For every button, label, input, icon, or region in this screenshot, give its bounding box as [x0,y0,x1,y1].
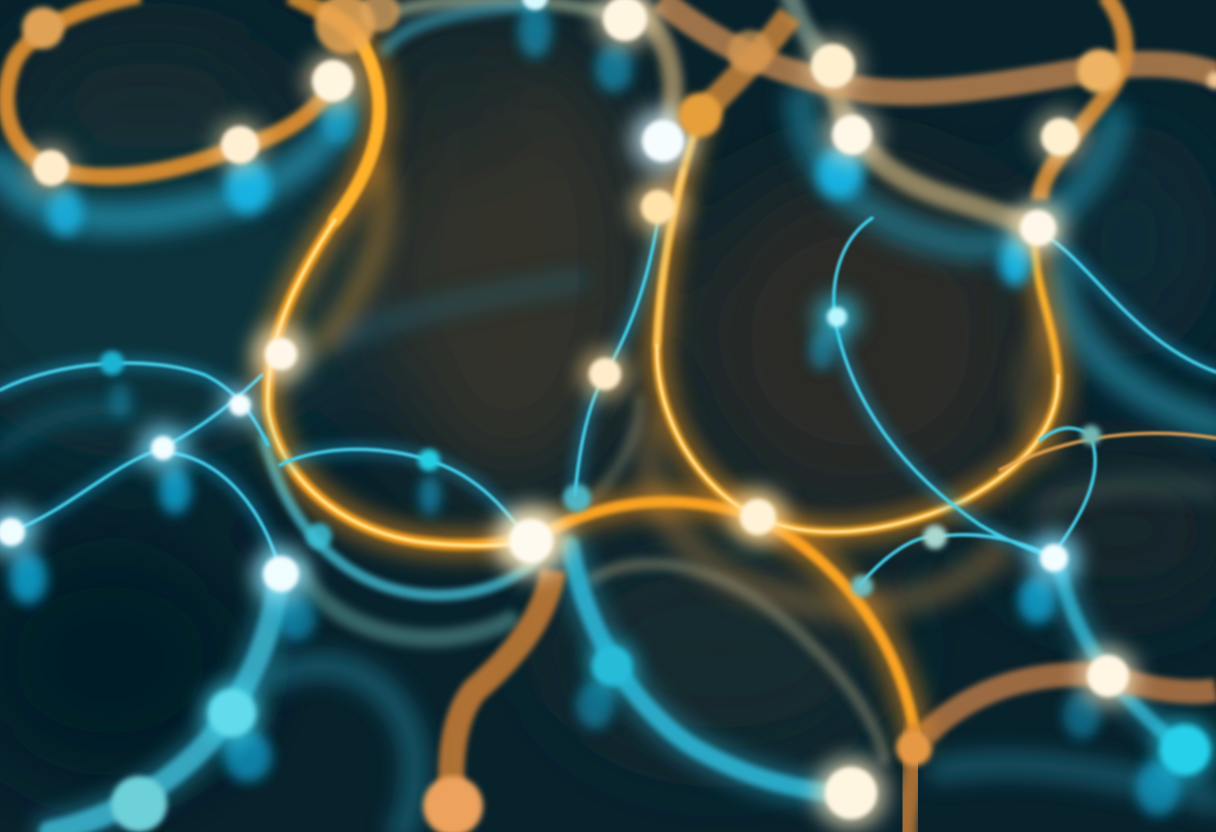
thin bright blue strands [0,205,1216,585]
bright orange strand: left loop [268,40,915,832]
bright orange strand: right loop [657,115,1216,532]
wide blue strands [50,440,1185,832]
pale tan and teal strands [300,0,1045,760]
